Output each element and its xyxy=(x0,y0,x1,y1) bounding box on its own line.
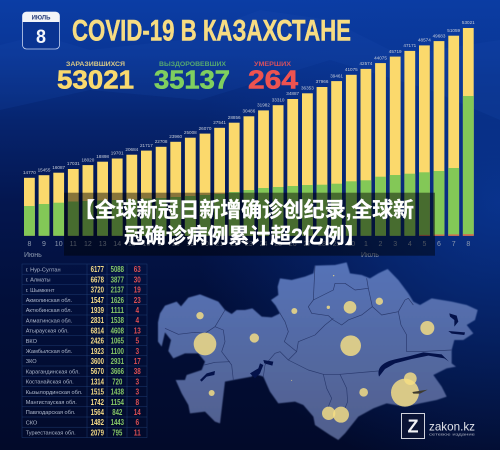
stat: recovered: 35137 xyxy=(154,64,230,94)
table: regional statistics: 3877 xyxy=(111,275,124,284)
table: regional statistics: 3666 xyxy=(111,367,124,376)
bar chart: cumulative cases by day: 28 xyxy=(318,241,326,248)
title: COVID-19 В КАЗАХСТАНЕ xyxy=(72,14,351,48)
bar chart: cumulative cases by day: 20 xyxy=(201,241,209,248)
table: regional statistics: Мангистауская обл. xyxy=(26,400,77,406)
bar chart: cumulative cases by day: 30 xyxy=(347,241,355,248)
table: regional statistics: г. Нур-Султан xyxy=(26,267,61,273)
table: regional statistics: 30 xyxy=(134,275,141,284)
bar chart: cumulative cases by day: 19701 xyxy=(111,151,124,156)
bar chart: cumulative cases by day: 25 xyxy=(274,241,282,248)
table: regional statistics: Актюбинская обл. xyxy=(26,308,73,314)
table: regional statistics: Костанайская обл. xyxy=(26,379,74,386)
bar chart: cumulative cases by day: 5 xyxy=(422,241,426,248)
bar chart: cumulative cases by day: 41075 xyxy=(345,67,358,72)
bar chart: cumulative cases by day: 34887 xyxy=(286,91,300,96)
bar chart: cumulative cases by day: 17 xyxy=(157,241,165,248)
table: regional statistics: 4 xyxy=(136,306,140,315)
bar chart: cumulative cases by day: 22708 xyxy=(155,139,168,144)
bar chart: cumulative cases by day: 3 xyxy=(393,241,397,248)
bar chart: cumulative cases by day: 31982 xyxy=(257,103,270,108)
table: regional statistics: 4 xyxy=(136,316,140,325)
bar chart: cumulative cases by day: 11 xyxy=(70,241,77,248)
bar chart: cumulative cases by day: 9 xyxy=(42,241,46,248)
bar chart: cumulative cases by day: 45719 xyxy=(389,49,402,54)
bar chart: cumulative cases by day: 14 xyxy=(113,241,121,248)
bar chart: cumulative cases by day: 12 xyxy=(84,241,92,248)
bar chart: cumulative cases by day: 29 xyxy=(333,241,341,248)
table: regional statistics: 1443 xyxy=(111,418,124,427)
table: regional statistics: 4608 xyxy=(111,326,124,335)
table: regional statistics: 5 xyxy=(136,337,140,346)
table: regional statistics: 1515 xyxy=(91,388,104,397)
table: regional statistics: 1438 xyxy=(111,388,124,397)
stat: deaths: УМЕРШИХ xyxy=(254,61,291,68)
table: regional statistics: 1564 xyxy=(91,408,104,417)
calendar icon: July 8: ИЮЛЬ xyxy=(32,16,51,22)
bar chart: cumulative cases by day: 14770 xyxy=(23,170,36,175)
map outline xyxy=(158,262,478,440)
table: regional statistics: г. Алматы xyxy=(26,278,51,284)
table: regional statistics: 795 xyxy=(112,428,123,437)
table: regional statistics: 2831 xyxy=(91,316,104,325)
bar chart: cumulative cases by day: 23 xyxy=(245,241,253,248)
logo: zakon.kz: Z xyxy=(408,416,418,436)
table: regional statistics: Жамбылская обл. xyxy=(26,349,73,355)
bar chart: cumulative cases by day: 51059 xyxy=(447,28,461,33)
table: regional statistics: 1626 xyxy=(111,296,124,305)
bar chart: cumulative cases by day: 30486 xyxy=(243,108,256,114)
bar chart: cumulative cases by day: 42574 xyxy=(360,61,373,66)
table: regional statistics: Алматинская обл. xyxy=(26,318,73,324)
map of Kazakhstan xyxy=(158,262,478,440)
stat: infected: 53021 xyxy=(57,64,134,94)
table: regional statistics: 1482 xyxy=(91,418,104,427)
bar chart: cumulative cases by day: Июнь xyxy=(24,252,42,259)
table: regional statistics: Карагандинская обл. xyxy=(26,369,80,375)
table: regional statistics: 2931 xyxy=(111,357,124,366)
table: regional statistics: Акмолинская обл. xyxy=(26,298,73,304)
table: regional statistics: 17 xyxy=(134,357,141,366)
table: regional statistics: 6678 xyxy=(91,275,104,284)
table: regional statistics: 2426 xyxy=(91,337,104,346)
table: regional statistics: 11 xyxy=(134,428,141,437)
stat: infected: ЗАРАЗИВШИХСЯ xyxy=(66,61,125,68)
table: regional statistics: СКО xyxy=(26,420,38,426)
bar chart: cumulative cases by day: 49683 xyxy=(433,33,446,38)
table: regional statistics: 2137 xyxy=(111,286,124,295)
bar chart: cumulative cases by day: 44075 xyxy=(374,55,387,60)
calendar icon: July 8: 8 xyxy=(36,27,46,48)
bar chart: cumulative cases by day: 15 xyxy=(128,241,136,248)
table: regional statistics: 1065 xyxy=(111,337,124,346)
bar chart: cumulative cases by day: 24 xyxy=(260,241,267,248)
headline overlay band xyxy=(64,193,435,256)
table: regional statistics: 6177 xyxy=(91,265,104,274)
table: regional statistics: 1939 xyxy=(91,306,104,315)
bar chart: cumulative cases by day: 18 xyxy=(172,241,180,248)
table: regional statistics: 19 xyxy=(134,286,141,295)
case bubbles xyxy=(194,275,434,423)
headline text: 冠确诊病例累计超2亿例】 xyxy=(124,225,365,248)
headline text: 【全球新冠日新增确诊创纪录,全球新 xyxy=(74,198,414,222)
bar chart: cumulative cases by day: 7 xyxy=(452,241,456,248)
bar chart: cumulative cases by day: 22 xyxy=(230,241,238,248)
bar chart: cumulative cases by day: 8 xyxy=(466,241,470,248)
table: regional statistics: 1547 xyxy=(91,296,104,305)
bar chart: cumulative cases by day: 8 xyxy=(27,241,31,248)
bar chart: cumulative cases by day: 16087 xyxy=(52,165,66,170)
table: regional statistics: ЗКО xyxy=(26,359,37,365)
bar chart: cumulative cases by day: 26 xyxy=(289,241,297,248)
table: regional statistics: Атырауская обл. xyxy=(26,329,69,335)
table: regional statistics: 5088 xyxy=(111,265,124,274)
region borders xyxy=(165,266,452,408)
bar chart: cumulative cases by day: 21717 xyxy=(140,143,153,148)
bar chart: cumulative cases by day: 17031 xyxy=(67,161,80,166)
stat: recovered: ВЫЗДОРОВЕВШИХ xyxy=(159,61,226,68)
bar chart: cumulative cases by day: 28856 xyxy=(228,115,241,120)
table: regional statistics: 8 xyxy=(136,398,140,407)
table: regional statistics: 23 xyxy=(134,296,141,305)
table: regional statistics: 1111 xyxy=(111,306,124,315)
bar chart: cumulative cases by day: 33310 xyxy=(272,97,285,102)
table: regional statistics: 2079 xyxy=(91,428,104,437)
table: regional statistics: ВКО xyxy=(26,339,38,345)
bar chart: cumulative cases by day: 2 xyxy=(379,241,383,248)
table: regional statistics xyxy=(22,264,147,438)
bar chart: cumulative cases by day: 15455 xyxy=(38,167,51,172)
table: regional statistics: 6814 xyxy=(91,326,104,335)
bar chart: cumulative cases by day xyxy=(23,20,475,259)
bar chart: cumulative cases by day: 21 xyxy=(216,241,224,248)
table: regional statistics: 3 xyxy=(136,347,140,356)
bar chart: cumulative cases by day: 1 xyxy=(364,241,368,248)
logo: zakon.kz: zakon.kz xyxy=(429,420,475,434)
lakes xyxy=(200,313,465,382)
table: regional statistics: 63 xyxy=(134,265,141,274)
bar chart: cumulative cases by day: 10 xyxy=(55,241,63,248)
bar chart: cumulative cases by day: 27 xyxy=(304,241,311,248)
bar chart: cumulative cases by day: 53021 xyxy=(462,20,475,25)
table: regional statistics: Кызылординская обл. xyxy=(26,390,83,396)
bar chart: cumulative cases by day: 36353 xyxy=(301,86,314,90)
table: regional statistics: 1314 xyxy=(91,377,104,386)
bar chart: cumulative cases by day: 39461 xyxy=(330,73,343,78)
bar chart: cumulative cases by day: 26070 xyxy=(199,126,212,131)
table: regional statistics: 14 xyxy=(134,408,141,417)
bar chart: cumulative cases by day: 16 xyxy=(143,241,150,248)
table: regional statistics: 38 xyxy=(134,367,141,376)
table: regional statistics: 3 xyxy=(136,388,140,397)
table: regional statistics: 3 xyxy=(136,377,140,386)
stat: deaths: 264 xyxy=(248,64,299,94)
table: regional statistics: 1154 xyxy=(111,398,124,407)
bar chart: cumulative cases by day: 4 xyxy=(408,241,412,248)
table: regional statistics: 1742 xyxy=(91,398,104,407)
bar chart: cumulative cases by day: 48574 xyxy=(418,38,431,43)
table: regional statistics: г. Шымкент xyxy=(26,288,55,294)
table: regional statistics: Туркестанская обл. xyxy=(26,431,76,437)
bar chart: cumulative cases by day: 18898 xyxy=(96,154,109,159)
table: regional statistics: 1100 xyxy=(111,347,124,356)
logo: zakon.kz: сетевое издание xyxy=(429,432,475,436)
bar chart: cumulative cases by day: 23960 xyxy=(169,134,183,139)
table: regional statistics: 1538 xyxy=(111,316,124,325)
table: regional statistics: 13 xyxy=(134,326,141,335)
calendar icon: July 8 xyxy=(22,12,60,49)
table: regional statistics: 3600 xyxy=(91,357,104,366)
bar chart: cumulative cases by day: 47171 xyxy=(403,43,417,48)
table: regional statistics: 3720 xyxy=(91,286,104,295)
bar chart: cumulative cases by day: 20684 xyxy=(125,147,139,152)
bar chart: cumulative cases by day: 13 xyxy=(99,241,107,248)
table: regional statistics: 1923 xyxy=(91,347,104,356)
bar chart: cumulative cases by day: 27541 xyxy=(213,120,226,125)
bar chart: cumulative cases by day: 18020 xyxy=(82,157,95,162)
bar chart: cumulative cases by day: Июль xyxy=(361,252,379,259)
bar chart: cumulative cases by day: 6 xyxy=(437,241,441,248)
table: regional statistics: Павлодарская обл. xyxy=(26,410,76,416)
logo: zakon.kz xyxy=(402,414,475,438)
headline text xyxy=(74,198,414,248)
table: regional statistics: 842 xyxy=(112,408,123,417)
bar chart: cumulative cases by day: 19 xyxy=(186,241,194,248)
table: regional statistics: 6 xyxy=(136,418,140,427)
table: regional statistics: 5670 xyxy=(91,367,104,376)
bar chart: cumulative cases by day: 37966 xyxy=(316,79,329,84)
bar chart: cumulative cases by day: 25008 xyxy=(184,130,197,135)
table: regional statistics: 720 xyxy=(112,377,123,386)
